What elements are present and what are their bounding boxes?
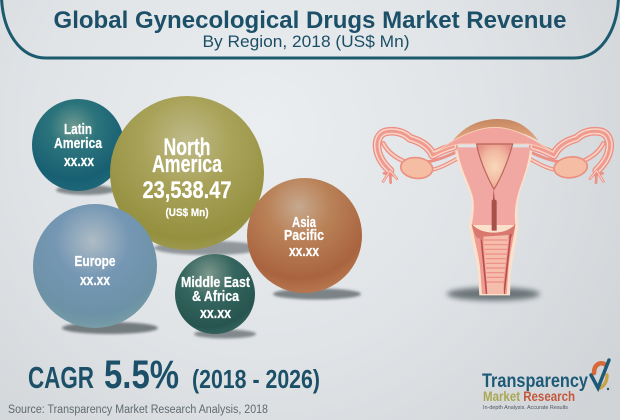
illustration: uterus bbox=[377, 119, 610, 301]
label: Latin bbox=[64, 121, 92, 138]
label: xx.xx bbox=[64, 153, 95, 170]
label: North bbox=[164, 134, 210, 161]
label: & Africa bbox=[192, 288, 240, 305]
header frame bbox=[2, 0, 618, 58]
source note: Source: Transparency Market Research Analysis, 2018 bbox=[8, 404, 268, 416]
logo wordmark: Transparency bbox=[482, 371, 588, 392]
uterus shadow bbox=[447, 287, 540, 301]
label: xx.xx bbox=[289, 243, 320, 260]
unit: (US$ Mn) bbox=[166, 207, 209, 219]
sphere bbox=[247, 178, 362, 293]
logo: Transparency Market Research bbox=[482, 360, 609, 411]
uterine top band bbox=[436, 127, 553, 152]
header panel bbox=[2, 0, 618, 58]
CAGR callout bbox=[28, 353, 320, 397]
cervical canal bbox=[492, 189, 497, 231]
logo tagline: In-depth Analysis. Accurate Results bbox=[483, 405, 569, 411]
label: America bbox=[54, 135, 103, 152]
label: Middle East bbox=[181, 274, 250, 291]
vaginal wall bbox=[472, 224, 515, 294]
label: Asia bbox=[292, 214, 316, 231]
title: Global Gynecological Drugs Market Revenue bbox=[54, 7, 566, 34]
uterus body outline bbox=[455, 151, 532, 295]
left fallopian tube bbox=[377, 131, 457, 183]
bubble: Europe bbox=[33, 204, 157, 328]
CAGR period: (2018 - 2026) bbox=[192, 364, 320, 394]
sphere bbox=[33, 204, 157, 328]
sphere bbox=[32, 99, 124, 191]
uterine dome bbox=[451, 119, 538, 143]
vaginal rugae bbox=[483, 235, 509, 294]
bubble: Latin America bbox=[32, 99, 124, 191]
label: xx.xx bbox=[200, 305, 232, 322]
logo check icon bbox=[591, 360, 609, 390]
uterine cavity bbox=[477, 144, 513, 189]
bubble: Asia Pacific bbox=[247, 178, 362, 293]
bubble: North America bbox=[110, 96, 264, 250]
right fallopian tube bbox=[529, 131, 610, 183]
label: Pacific bbox=[284, 227, 324, 244]
label: America bbox=[152, 151, 222, 178]
logo subtitle: Market Research bbox=[483, 388, 575, 404]
vaginal canal edges bbox=[481, 234, 511, 294]
uterus muscle wall bbox=[457, 147, 530, 225]
label: Europe bbox=[74, 253, 116, 270]
subtitle: By Region, 2018 (US$ Mn) bbox=[202, 32, 410, 51]
CAGR value: 5.5% bbox=[104, 353, 179, 397]
sphere bbox=[110, 96, 264, 250]
bubble shadows bbox=[56, 185, 361, 338]
label: xx.xx bbox=[80, 272, 111, 289]
sphere bbox=[175, 254, 255, 334]
label: 23,538.47 bbox=[142, 177, 232, 204]
ovaries bbox=[400, 155, 588, 180]
bubble: Middle East & Africa bbox=[175, 254, 255, 334]
rugae lines bbox=[484, 240, 508, 282]
fornix band bbox=[472, 224, 515, 240]
CAGR label: CAGR bbox=[28, 360, 94, 395]
